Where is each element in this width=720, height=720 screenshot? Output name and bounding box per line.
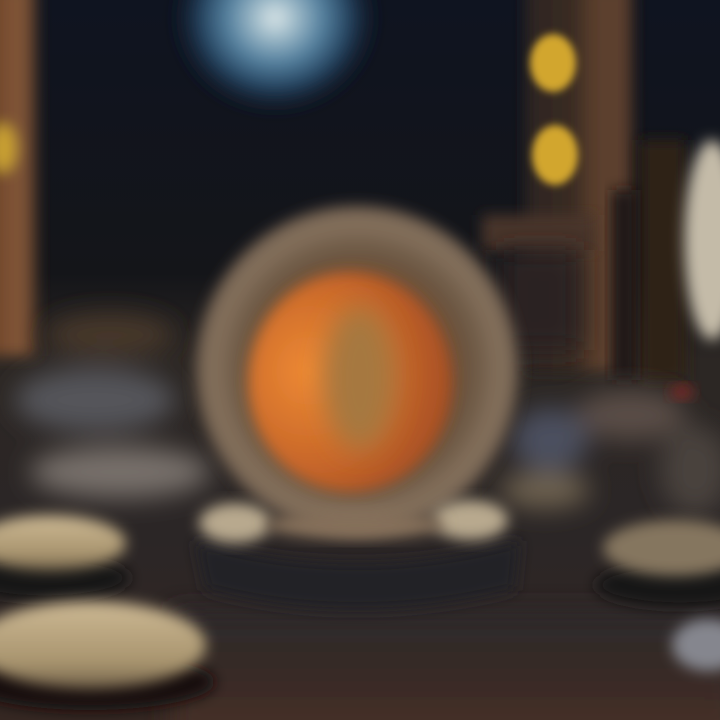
moon glow xyxy=(170,0,380,116)
left disc front xyxy=(0,601,215,710)
distant discs xyxy=(15,313,720,515)
table floor xyxy=(170,610,720,720)
right disc xyxy=(595,520,720,607)
left disc middle xyxy=(0,515,130,600)
far right vase xyxy=(612,140,720,380)
right pillar with lights xyxy=(482,0,635,371)
small red accent xyxy=(670,385,694,399)
left pillar xyxy=(0,0,38,356)
icon: lower yellow light xyxy=(532,125,578,185)
coin base bowl xyxy=(195,500,520,610)
icon: upper yellow light xyxy=(530,34,576,92)
coin outer ring xyxy=(195,205,519,535)
coin orange face xyxy=(248,272,452,492)
coin centre figure xyxy=(324,306,396,450)
right front disc xyxy=(672,619,720,671)
